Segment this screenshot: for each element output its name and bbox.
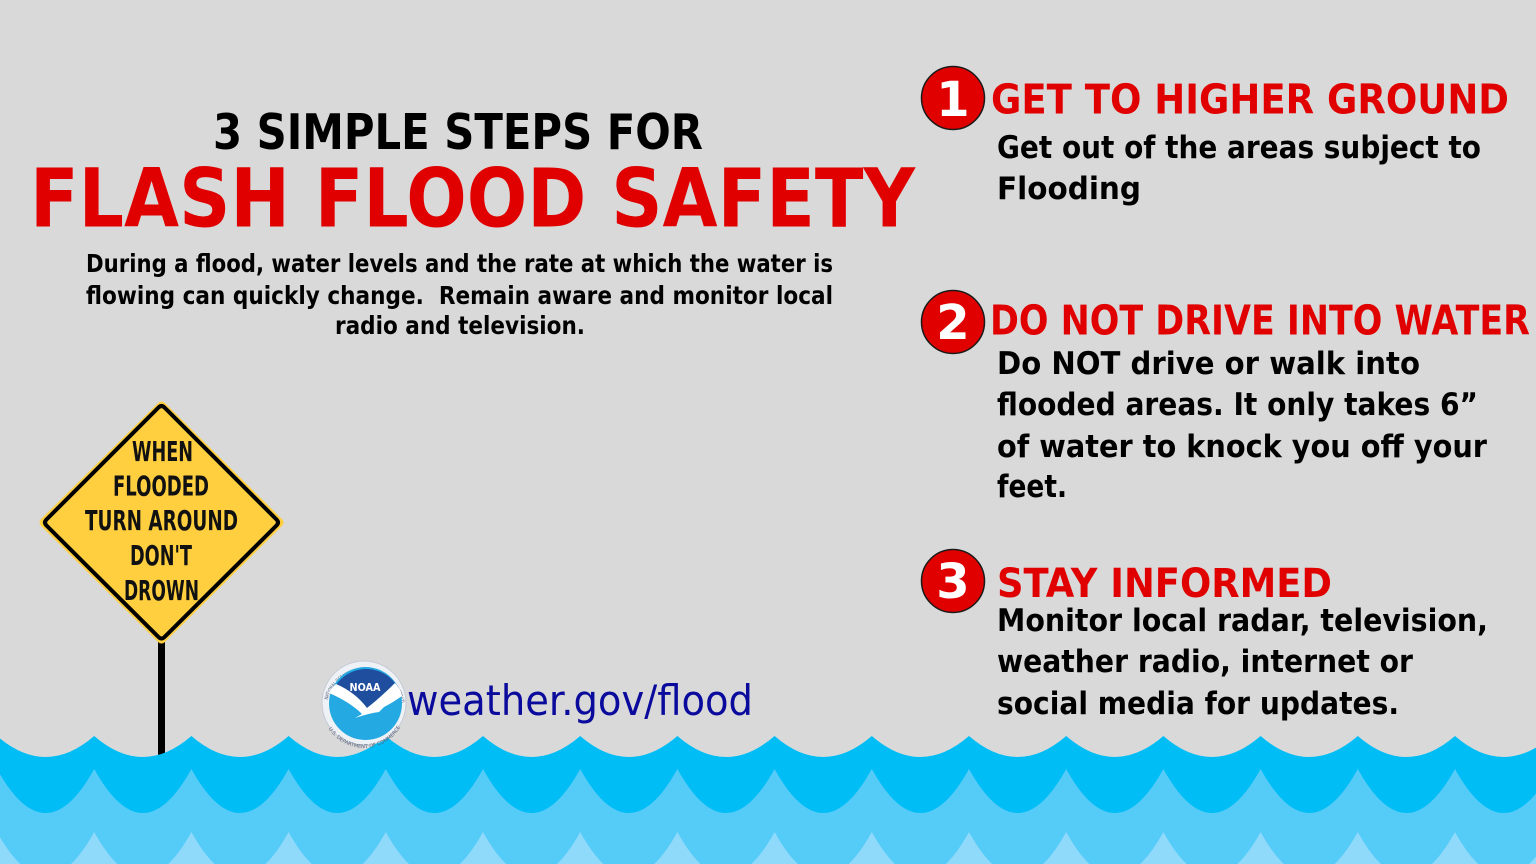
step 1 number badge: 1	[936, 72, 970, 128]
road sign: when flooded turn around don't drown	[44, 406, 279, 758]
step 3 body	[997, 603, 1488, 722]
wave layer: top	[0, 736, 1536, 864]
step 2 number badge	[922, 290, 984, 354]
step 3 body: weather radio, internet or	[997, 644, 1414, 680]
step 2	[922, 290, 1530, 505]
step 1	[922, 66, 1509, 207]
step 2 body: feet.	[997, 469, 1067, 505]
step 1 body	[997, 130, 1481, 207]
sign text: DON'T	[130, 539, 192, 572]
step 1 number badge	[922, 66, 984, 130]
step 1 body: Flooding	[997, 171, 1141, 207]
NOAA logo: U.S. DEPARTMENT OF COMMERCE	[329, 725, 400, 748]
step 2 body: Do NOT drive or walk into	[997, 346, 1420, 382]
title: 3 simple steps for: 3 SIMPLE STEPS FOR	[213, 104, 703, 161]
sign text: TURN AROUND	[85, 504, 238, 537]
step 2 body	[997, 346, 1488, 505]
sign diamond	[44, 406, 279, 639]
sign text: DROWN	[124, 574, 199, 607]
website link text: weather.gov/flood	[407, 676, 753, 725]
wave layer: bottom	[0, 832, 1536, 864]
step 3 number badge	[922, 550, 984, 612]
step 1 body: Get out of the areas subject to	[997, 130, 1481, 166]
intro text block	[86, 249, 833, 340]
step 2 number badge: 2	[936, 295, 970, 351]
step 3 body: Monitor local radar, television,	[997, 603, 1488, 639]
NOAA logo: NATIONAL OCEANIC AND ATMOSPHERIC ADMINISTRATION	[324, 670, 405, 702]
NOAA logo: NOAA	[350, 681, 381, 694]
sign text: FLOODED	[113, 470, 209, 502]
sign text: WHEN	[132, 435, 193, 468]
intro text block: radio and television.	[335, 311, 585, 340]
step 3 number badge: 3	[936, 554, 970, 610]
step 2 body: of water to knock you off your	[997, 429, 1488, 465]
NOAA logo	[322, 660, 406, 748]
step 3	[922, 550, 1488, 722]
title: flash flood safety: FLASH FLOOD SAFETY	[30, 152, 916, 246]
sign text	[85, 435, 238, 607]
step 3 body: social media for updates.	[997, 686, 1399, 722]
intro text block: flowing can quickly change. Remain aware and monitor local	[86, 281, 833, 310]
step 3 heading: STAY INFORMED	[997, 561, 1332, 607]
waves	[0, 736, 1536, 864]
wave layer: middle	[0, 769, 1536, 864]
step 2 body: flooded areas. It only takes 6”	[997, 387, 1478, 423]
intro text block: During a flood, water levels and the rate at which the water is	[86, 249, 833, 278]
sign post	[158, 640, 165, 758]
